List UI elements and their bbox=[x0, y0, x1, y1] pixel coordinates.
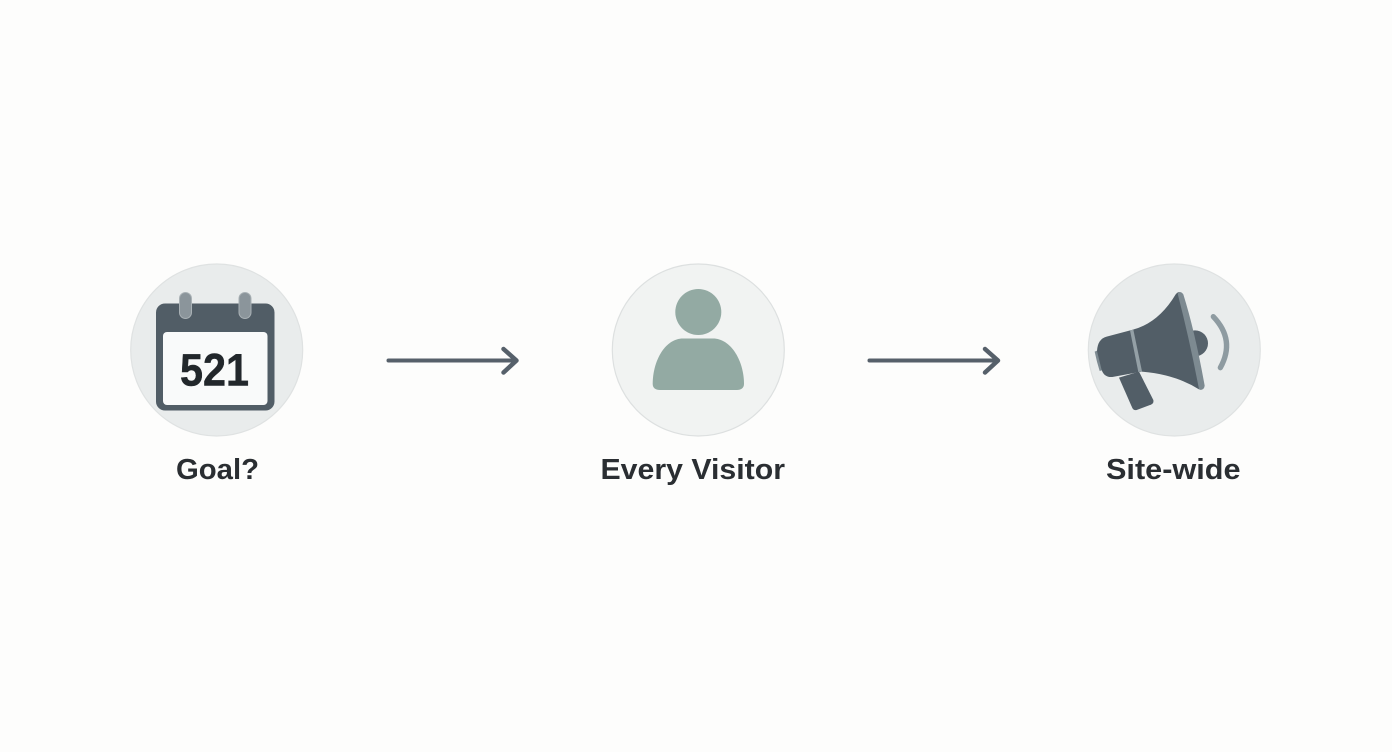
icon circle: calendar background bbox=[131, 264, 303, 436]
icon: person bbox=[653, 289, 744, 390]
icon circle: person background bbox=[612, 264, 784, 436]
icon: megaphone bbox=[1095, 292, 1227, 410]
label: Goal?: Goal? bbox=[176, 454, 259, 486]
arrow: step 1 to step 2 bbox=[388, 349, 516, 372]
step 1: goal calendar bbox=[131, 264, 303, 486]
icon circle: megaphone background bbox=[1088, 264, 1260, 436]
icon: calendar: 521 bbox=[180, 344, 249, 396]
icon: calendar bbox=[156, 292, 274, 410]
arrow: step 2 to step 3 bbox=[870, 349, 998, 372]
label: Every Visitor: Every Visitor bbox=[600, 454, 785, 486]
step 3: site-wide bbox=[1088, 264, 1260, 486]
step 2: every visitor bbox=[600, 264, 785, 486]
label: Site-wide: Site-wide bbox=[1106, 454, 1240, 486]
